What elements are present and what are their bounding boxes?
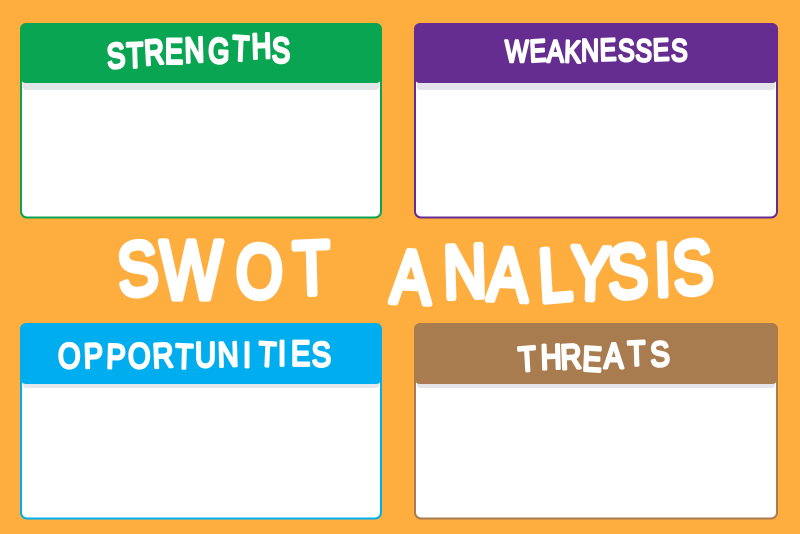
- header shadow: strengths: [23, 78, 379, 90]
- header band: strengths: [20, 23, 382, 83]
- panel body: opportunities: [21, 324, 381, 518]
- title word: SWOT: W: [160, 223, 223, 316]
- header band: weaknesses: [414, 23, 778, 83]
- heading: strengths: STRENGTHS: [105, 26, 290, 77]
- panel: weaknesses: [414, 23, 778, 218]
- panel: opportunities: [20, 323, 382, 518]
- title word: SWOT: S: [114, 226, 161, 313]
- header band: opportunities: [20, 323, 382, 384]
- header shadow: opportunities: [23, 379, 379, 388]
- header band: threats: [414, 323, 778, 384]
- heading: threats: THREATS: [517, 333, 671, 379]
- header shadow: threats: [417, 379, 775, 388]
- title word: SWOT: T: [292, 227, 331, 311]
- title: [114, 223, 716, 320]
- panel body: threats: [415, 324, 777, 518]
- title word: ANALYSIS: ANALYSIS: [390, 225, 716, 320]
- panel body: strengths: [21, 24, 381, 218]
- panel: threats: [414, 323, 778, 518]
- panel: strengths: [20, 23, 382, 218]
- heading: opportunities: OPPORTUNITIES: [58, 334, 332, 376]
- title word: SWOT: O: [234, 230, 284, 315]
- heading: weaknesses: WEAKNESSES: [505, 31, 688, 69]
- panel body: weaknesses: [415, 24, 777, 218]
- header shadow: weaknesses: [417, 78, 775, 90]
